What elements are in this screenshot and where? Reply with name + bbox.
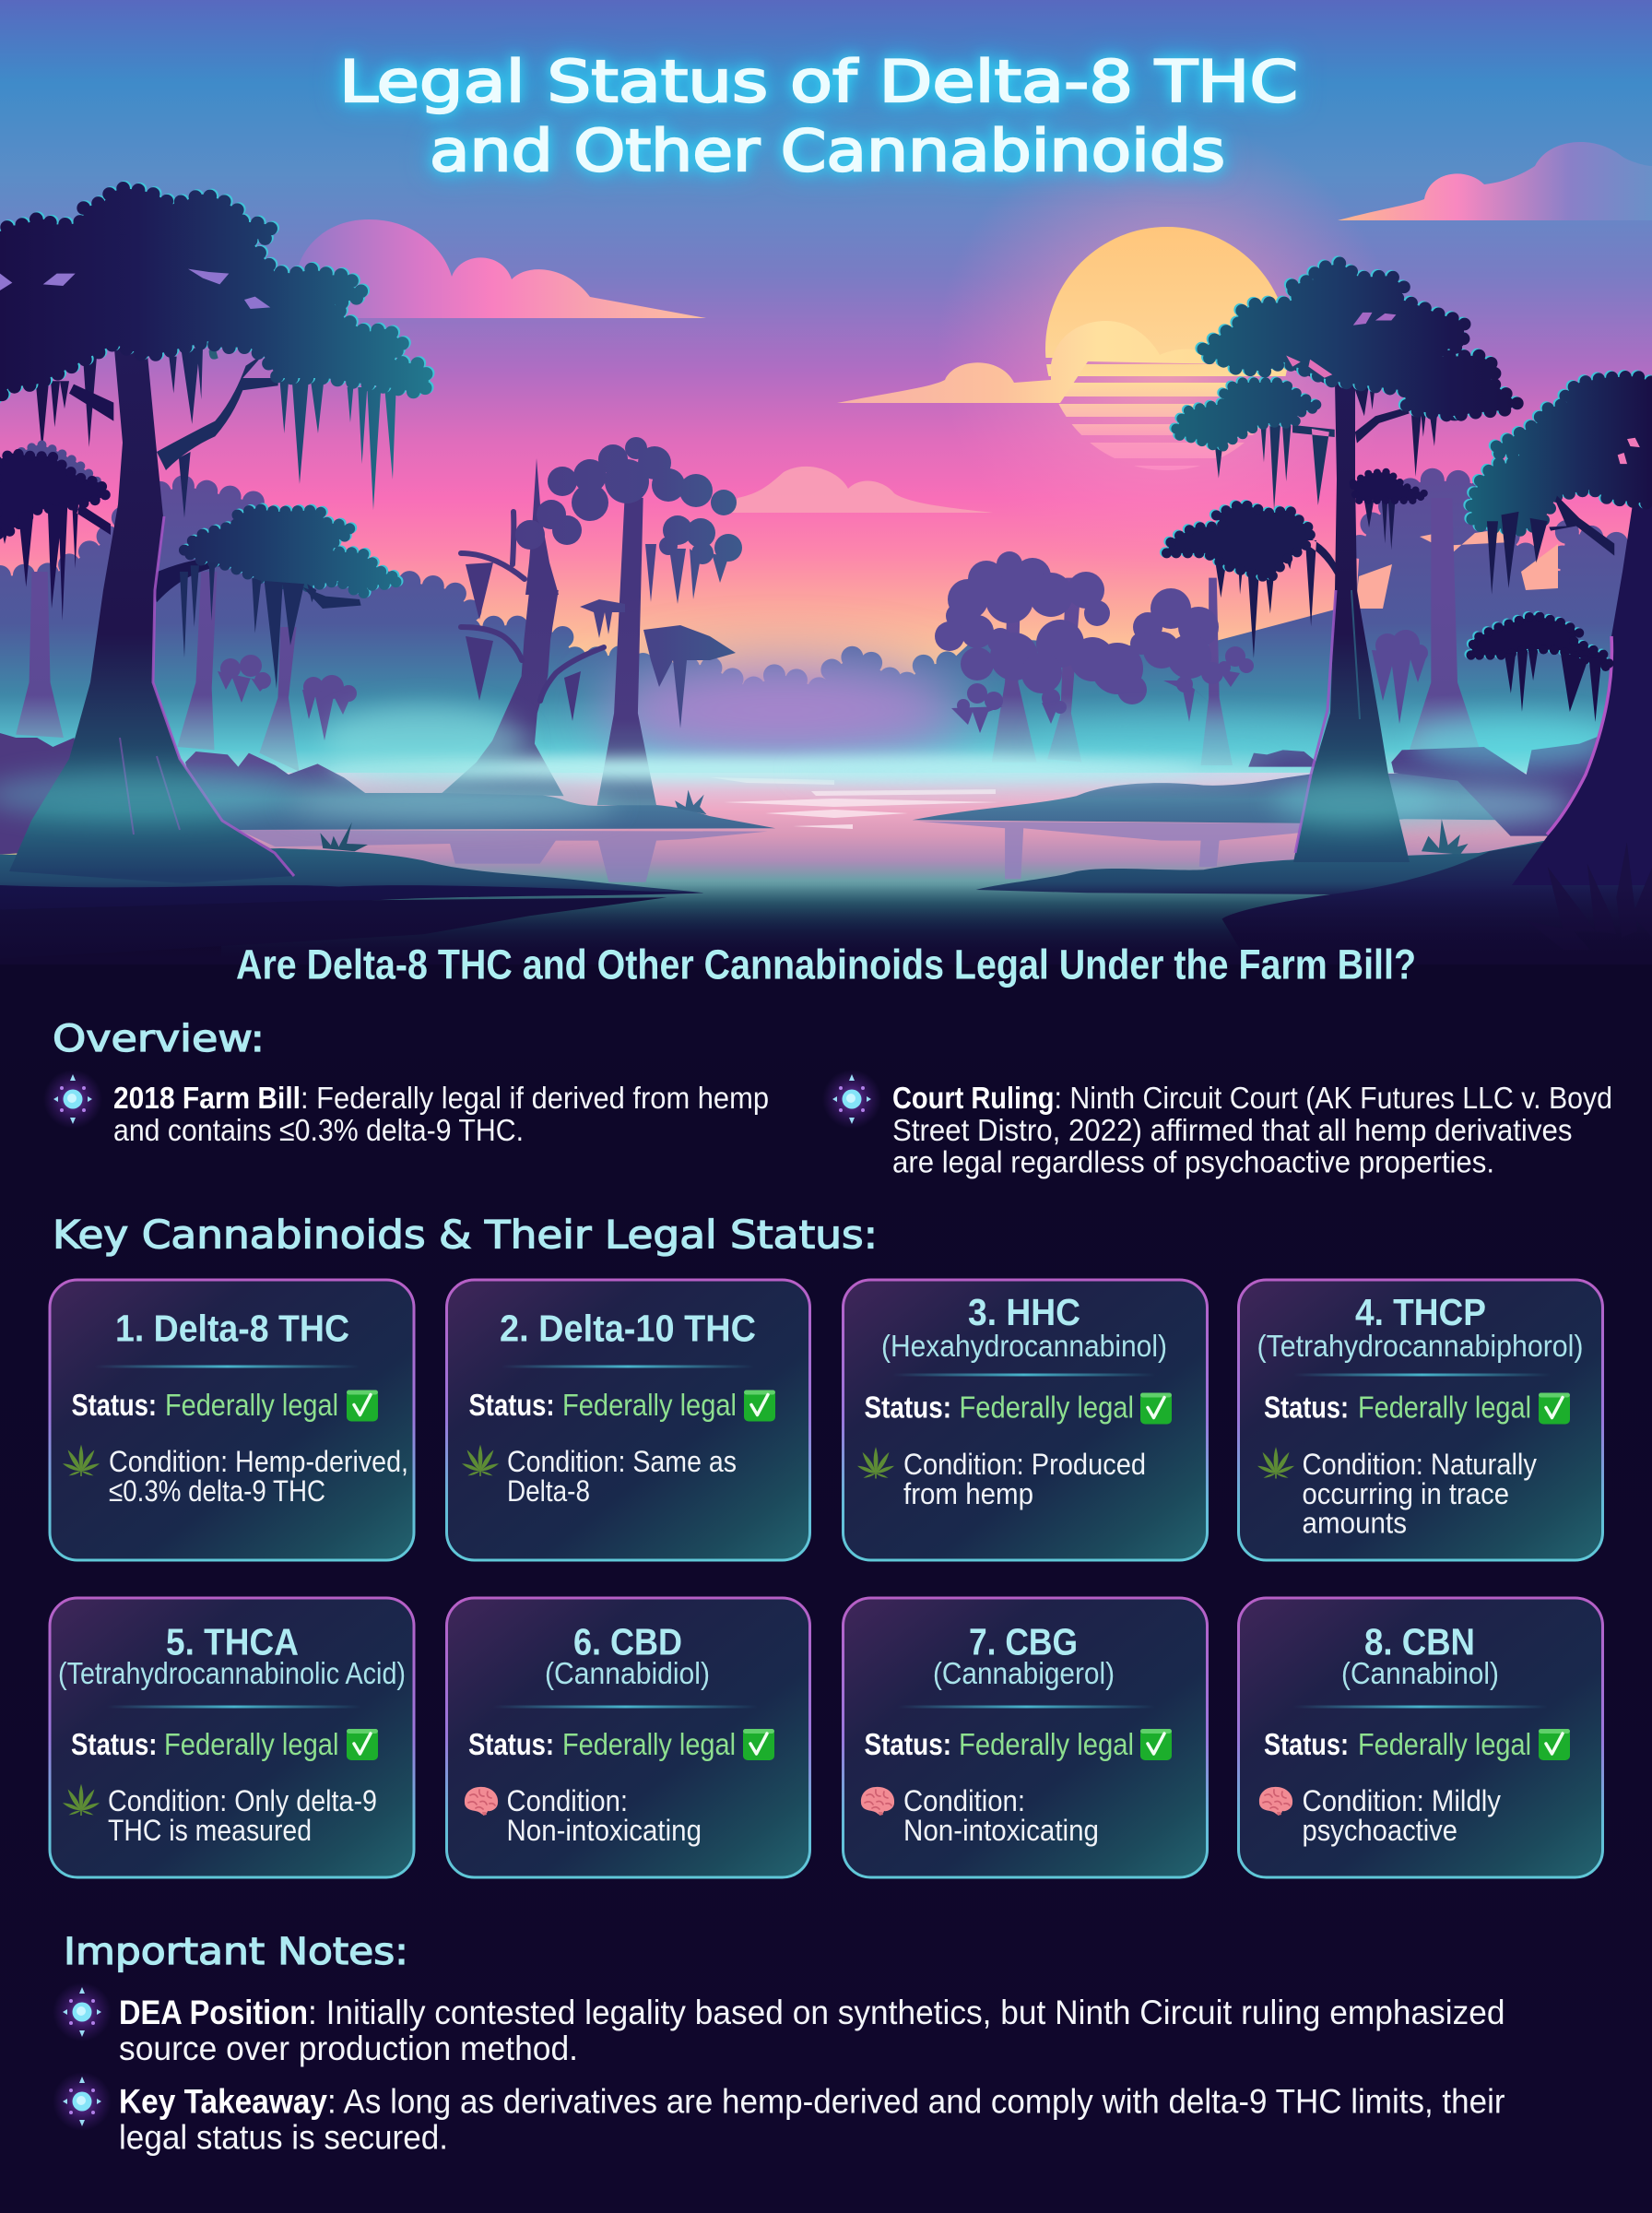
overview heading: Overview: <box>53 1018 265 1060</box>
island, left <box>185 751 775 882</box>
lilac glow <box>599 659 968 761</box>
card title: 3. HHC <box>968 1291 1080 1333</box>
card title: 5. THCA <box>166 1621 299 1663</box>
peach gaps in far canopy <box>1355 527 1558 609</box>
status <box>72 1388 378 1422</box>
cloud: across sun <box>837 321 1235 403</box>
moss on tall cypress <box>645 544 728 604</box>
status: Federally legal <box>1358 1391 1531 1424</box>
condition: Condition: Same as <box>507 1445 737 1478</box>
card title <box>933 1621 1115 1691</box>
condition: Condition: <box>903 1784 1025 1817</box>
status <box>1264 1727 1570 1761</box>
condition: Non-intoxicating <box>903 1814 1099 1847</box>
note: DEA position <box>119 1993 1504 2067</box>
near tree, left: trunk <box>9 338 294 883</box>
foreground land, left <box>0 790 707 959</box>
condition: Condition: Naturally <box>1302 1448 1538 1481</box>
card title: 8. CBN <box>1364 1621 1475 1663</box>
panel: card 2 Delta-10 THC <box>446 1280 809 1560</box>
small moss clusters, right <box>951 630 1428 733</box>
foreground land, right <box>976 805 1652 959</box>
near tree, right: mid canopy <box>1353 472 1426 501</box>
card title: 1. Delta-8 THC <box>115 1308 349 1350</box>
status: Federally legal <box>562 1727 736 1761</box>
icon: hemp leaf <box>461 1445 500 1476</box>
condition: from hemp <box>903 1477 1033 1510</box>
hero illustration: cypress swamp at sunset <box>0 0 1652 964</box>
condition <box>903 1784 1099 1847</box>
mid tree: tall cypress <box>515 437 742 805</box>
status <box>468 1727 774 1761</box>
title <box>339 48 1298 184</box>
card title: (Tetrahydrocannabiphorol) <box>1257 1330 1584 1364</box>
section: overview <box>43 1018 1612 1180</box>
far bank, right <box>1248 731 1652 836</box>
near tree, right: upper canopies <box>1167 263 1517 579</box>
note: key takeaway: legal status is secured. <box>119 2117 448 2156</box>
title: Legal Status of Delta-8 THC <box>339 48 1298 115</box>
near tree, left: moss and branches <box>35 348 396 602</box>
near tree, left: lower canopy <box>184 509 399 595</box>
icon: hemp leaf <box>62 1445 100 1476</box>
status <box>71 1727 378 1761</box>
icon: brain <box>1259 1787 1292 1816</box>
status <box>865 1391 1172 1424</box>
card title: 6. CBD <box>573 1621 682 1663</box>
background trees, right <box>992 498 1484 765</box>
status: Status: <box>468 1388 555 1422</box>
note: DEA position: source over production method. <box>119 2029 578 2067</box>
condition <box>1302 1448 1538 1540</box>
mist bands <box>286 705 1613 825</box>
background trees, left <box>16 572 299 772</box>
condition: psychoactive <box>1302 1814 1457 1847</box>
note: key takeaway: Key Takeaway <box>119 2082 327 2121</box>
canopies, centre-right trees <box>935 551 1428 733</box>
card title: (Cannabidiol) <box>545 1657 710 1691</box>
panel: card 4 THCP <box>1239 1280 1602 1560</box>
sky gaps in left canopy <box>0 269 270 309</box>
icon: sparkle bullet <box>53 2072 112 2131</box>
far treeline <box>0 479 1652 793</box>
mid tree: gnarled dead tree <box>442 458 604 796</box>
overview point: court ruling <box>892 1082 1612 1180</box>
water <box>221 773 1652 962</box>
note: key takeaway: : As long as derivatives are hemp-derived and comply with delta-9 THC limits, their <box>327 2082 1504 2121</box>
panel: card 6 CBD <box>446 1598 809 1877</box>
water streaks <box>710 777 1000 829</box>
condition: Delta-8 <box>507 1474 590 1508</box>
reflection, left island <box>238 830 768 882</box>
panel: card 1 Delta-8 THC <box>50 1280 414 1560</box>
grass tuft, right shore <box>1422 819 1469 855</box>
sky gradient <box>0 0 1652 922</box>
moss: left tree lower canopy <box>180 562 361 689</box>
near tree, far right: canopy <box>1471 376 1652 668</box>
status <box>865 1727 1172 1761</box>
status <box>1264 1391 1570 1424</box>
card title: 4. THCP <box>1355 1291 1486 1333</box>
status: Status: <box>1264 1727 1349 1761</box>
icon: brain <box>465 1787 498 1816</box>
overview point: court ruling: Street Distro, 2022) affirmed that all hemp derivatives <box>892 1114 1573 1148</box>
cloud: upper left <box>294 219 706 318</box>
condition <box>108 1784 377 1847</box>
overview point: 2018 Farm Bill: and contains ≤0.3% delta-9 THC. <box>113 1114 524 1148</box>
condition <box>1302 1784 1502 1847</box>
island, right <box>913 731 1652 879</box>
condition: Condition: Hemp-derived, <box>109 1445 408 1478</box>
condition: occurring in trace <box>1302 1477 1509 1510</box>
moss: far right tree <box>1487 438 1640 722</box>
overview point: 2018 Farm Bill <box>113 1082 769 1148</box>
status: Status: <box>1264 1391 1349 1424</box>
status: Status: <box>865 1727 951 1761</box>
panel: card 5 THCA <box>50 1598 414 1877</box>
panel: card 3 HHC <box>843 1280 1208 1560</box>
status: Federally legal <box>1358 1727 1531 1761</box>
icon: hemp leaf <box>1257 1447 1295 1479</box>
card title <box>881 1291 1167 1364</box>
condition: ≤0.3% delta-9 THC <box>109 1474 325 1508</box>
icon: sparkle bullet <box>43 1070 102 1129</box>
moss on dead tree <box>466 562 581 721</box>
overview point: 2018 Farm Bill: : Federally legal if derived from hemp <box>301 1082 769 1116</box>
card title: (Hexahydrocannabinol) <box>881 1330 1167 1364</box>
subtitle: Are Delta-8 THC and Other Cannabinoids Legal Under the Farm Bill? <box>236 941 1416 988</box>
near tree, right: moss and branches <box>1214 360 1471 658</box>
moss clumps, background left <box>218 655 357 740</box>
icon: sparkle bullet <box>53 1982 112 2041</box>
fade into page background <box>0 885 1652 964</box>
card title <box>1257 1291 1584 1364</box>
status: Status: <box>71 1727 157 1761</box>
status <box>468 1388 775 1422</box>
condition: Condition: Only delta-9 <box>108 1784 377 1817</box>
grass tuft, island <box>675 790 707 814</box>
card title: (Cannabinol) <box>1341 1657 1499 1691</box>
overview point: 2018 Farm Bill: 2018 Farm Bill <box>113 1082 301 1116</box>
note: DEA position: DEA Position <box>119 1993 308 2031</box>
icon: sparkle bullet <box>822 1070 881 1129</box>
card title: 2. Delta-10 THC <box>500 1308 756 1350</box>
card title: 7. CBG <box>969 1621 1078 1663</box>
heading: key cannabinoids: Key Cannabinoids & Their Legal Status: <box>53 1212 878 1258</box>
note: DEA position: : Initially contested legality based on synthetics, but Ninth Circuit ruling emphasized <box>308 1993 1504 2031</box>
reflection, right island <box>917 822 1351 879</box>
condition <box>507 1445 737 1508</box>
panel: card 7 CBG <box>843 1598 1208 1877</box>
near tree, far right: trunk <box>1512 498 1652 885</box>
status: Federally legal <box>165 1388 338 1422</box>
notes heading: Important Notes: <box>64 1931 408 1973</box>
near tree, left: upper canopy <box>0 188 429 403</box>
cloud: upper right <box>1338 142 1652 220</box>
condition: Condition: Mildly <box>1302 1784 1502 1817</box>
condition <box>507 1784 702 1847</box>
condition: Condition: <box>507 1784 628 1817</box>
spiky foreground reeds, lower right <box>1527 842 1652 950</box>
right canopy sky gaps <box>1286 313 1396 378</box>
condition: Non-intoxicating <box>507 1814 702 1847</box>
icon: hemp leaf <box>62 1784 100 1816</box>
sun with stripes <box>962 146 1363 500</box>
card title: (Cannabigerol) <box>933 1657 1115 1691</box>
card title <box>1341 1621 1499 1691</box>
status: Federally legal <box>562 1388 737 1422</box>
card title <box>58 1621 406 1691</box>
title: and Other Cannabinoids <box>430 117 1225 184</box>
status: Status: <box>72 1388 157 1422</box>
condition <box>109 1445 408 1508</box>
panel: card 8 CBN <box>1239 1598 1602 1877</box>
cloud: lower centre <box>731 467 993 513</box>
status: Federally legal <box>959 1391 1134 1424</box>
bank, far left <box>0 733 79 855</box>
section: important notes <box>53 1931 1504 2156</box>
condition <box>903 1448 1146 1510</box>
overview point: court ruling: Court Ruling <box>892 1082 1055 1116</box>
status: Status: <box>468 1727 554 1761</box>
icon: hemp leaf <box>856 1447 895 1479</box>
status: Federally legal <box>959 1727 1134 1761</box>
condition: THC is measured <box>108 1814 312 1847</box>
mist over near trees <box>0 771 1438 824</box>
note: key takeaway <box>119 2082 1504 2156</box>
overview point: court ruling: are legal regardless of psychoactive properties. <box>892 1145 1494 1180</box>
card title <box>545 1621 710 1691</box>
condition: amounts <box>1302 1507 1407 1540</box>
near tree, right: trunk <box>1293 383 1410 862</box>
status: Federally legal <box>164 1727 339 1761</box>
icon: brain <box>861 1787 894 1816</box>
condition: Condition: Produced <box>903 1448 1146 1481</box>
status: Status: <box>865 1391 951 1424</box>
grass tuft, left shore <box>320 822 368 851</box>
card title: (Tetrahydrocannabinolic Acid) <box>58 1657 406 1691</box>
near tree, far-left lower canopy <box>0 444 111 621</box>
